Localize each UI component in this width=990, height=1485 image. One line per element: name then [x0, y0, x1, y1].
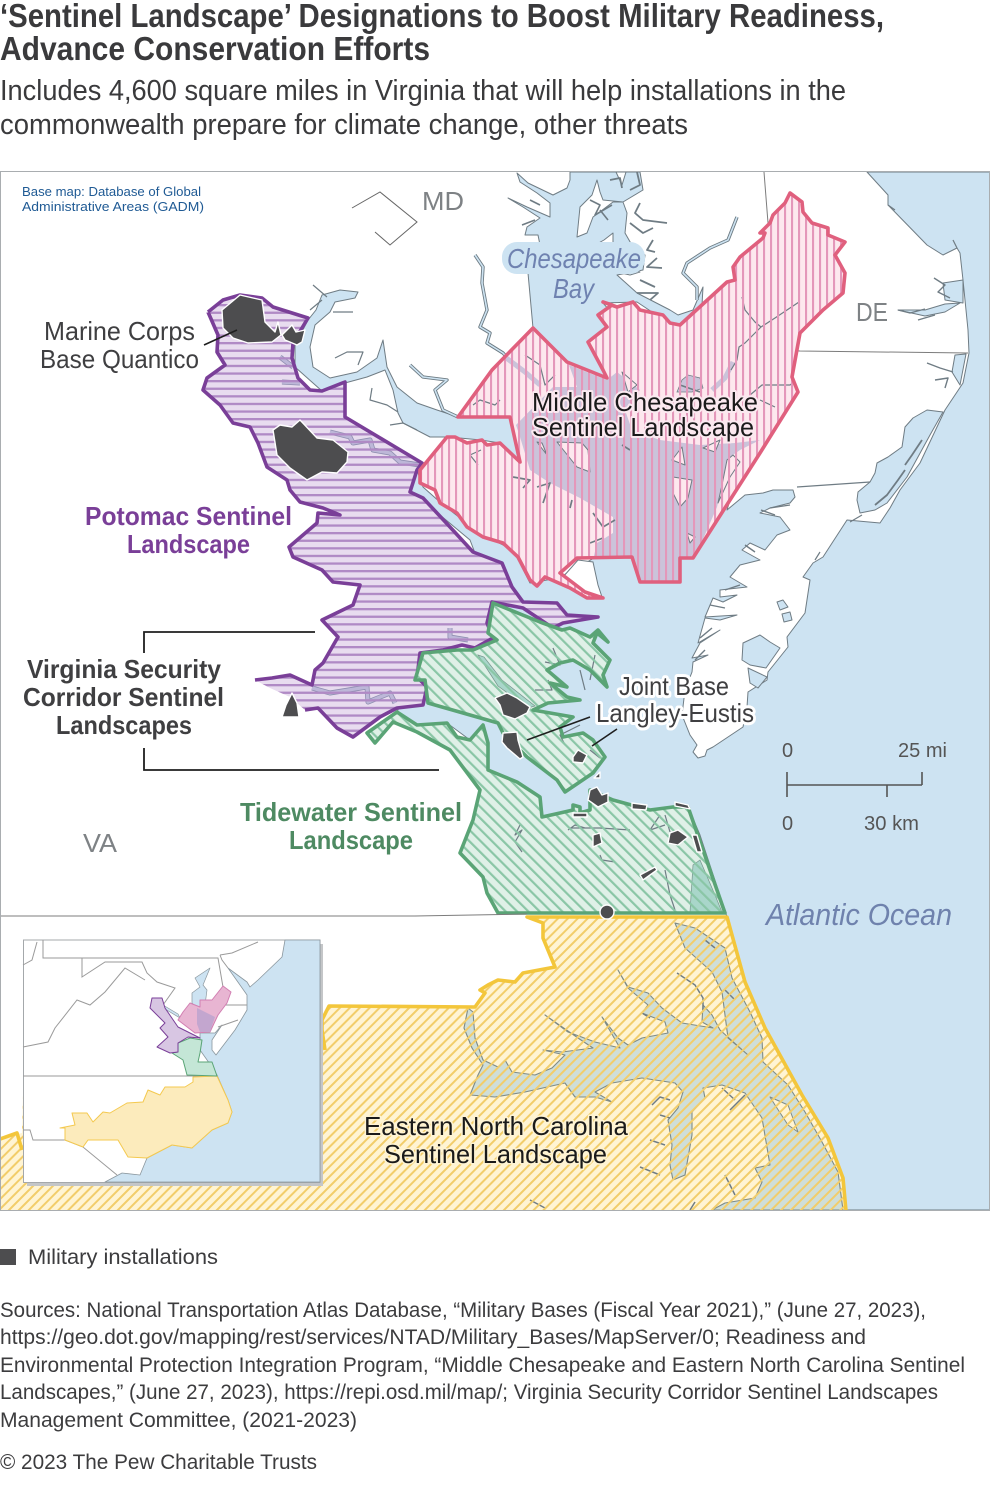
- leader: Quantico: [204, 330, 237, 345]
- label: Virginia Security Corridor Sentinel Landscapes: Landscapes: [56, 710, 192, 740]
- base map note: Administrative Areas (GADM): [22, 199, 204, 214]
- title: [0, 0, 884, 67]
- water: ocean and Chesapeake Bay: [295, 172, 990, 1210]
- green region inner water: [478, 655, 722, 912]
- purple region rivers: [280, 357, 468, 703]
- inset state lines: [23, 940, 258, 1175]
- label: Potomac Sentinel Landscape: [86, 506, 290, 558]
- label: Potomac Sentinel Landscape: Potomac Sentinel: [85, 501, 292, 531]
- water: coastal lagoons and inlets on the Delmarva shore: [742, 280, 966, 688]
- label: Chesapeake Bay: [502, 242, 645, 304]
- inset upper bay: [163, 968, 210, 1018]
- label: Virginia Security Corridor Sentinel Landscapes: Virginia Security: [27, 654, 222, 684]
- sources: Environmental Protection Integration Program, “Middle Chesapeake and Eastern North Carolina Sentinel: [0, 1354, 965, 1377]
- military installations: [222, 295, 702, 919]
- subtitle: Includes 4,600 square miles in Virginia that will help installations in the: [0, 75, 846, 107]
- state line: Virginia and North Carolina border: [0, 914, 527, 916]
- legend: military installations: Military installations: [28, 1246, 218, 1269]
- label: Tidewater Sentinel Landscape: [240, 802, 460, 854]
- map frame: [0, 172, 990, 1210]
- label: Virginia Security Corridor Sentinel Landscapes: Corridor Sentinel: [23, 682, 224, 712]
- inset locator map: [23, 940, 323, 1186]
- sources: Landscapes,” (June 27, 2023), https://repi.osd.mil/map/; Virginia Security Corridor Sentinel Landscapes: [0, 1381, 938, 1404]
- label: Joint Base Langley-Eustis: Langley-Eustis: [596, 698, 754, 728]
- state line: Maryland and Delaware border: [764, 172, 968, 353]
- label: Joint Base Langley-Eustis: [596, 671, 754, 728]
- region: Middle Chesapeake Sentinel Landscape: [418, 191, 847, 600]
- panel: map: [0, 171, 990, 1211]
- label: Tidewater Sentinel Landscape: Tidewater Sentinel: [240, 797, 462, 827]
- label: Marine Corps Base Quantico: Base Quantico: [40, 344, 199, 374]
- label: Joint Base Langley-Eustis: Joint Base: [619, 671, 729, 701]
- state line: Washington DC diamond: [352, 192, 417, 245]
- label: Eastern North Carolina Sentinel Landscape: Eastern North Carolina: [364, 1111, 629, 1141]
- scale bar: [782, 740, 947, 835]
- inset Potomac: [150, 998, 200, 1053]
- subtitle: commonwealth prepare for climate change, other threats: [0, 109, 688, 141]
- leaders: Joint Base Langley-Eustis: [527, 717, 617, 746]
- label: Potomac Sentinel Landscape: Landscape: [127, 529, 250, 559]
- state labels: VA: [83, 828, 118, 858]
- label: Virginia Security Corridor Sentinel Landscapes: [23, 654, 224, 740]
- label: Eastern North Carolina Sentinel Landscape: [364, 1111, 629, 1169]
- base map note: Base map: Database of Global: [22, 184, 201, 199]
- label: Atlantic Ocean: Atlantic Ocean: [764, 897, 952, 932]
- label: Middle Chesapeake Sentinel Landscape: [532, 387, 758, 442]
- label: Chesapeake Bay: Chesapeake: [507, 243, 641, 274]
- thin rivers and coast detail: [310, 172, 957, 660]
- sources: Sources: National Transportation Atlas Database, “Military Bases (Fiscal Year 2021),” (June 27, 2023),: [0, 1299, 926, 1322]
- region: Tidewater Sentinel Landscape: [367, 603, 725, 913]
- label: Marine Corps Base Quantico: Marine Corps: [44, 316, 195, 346]
- copyright: © 2023 The Pew Charitable Trusts: [0, 1451, 317, 1474]
- inset ocean: [105, 940, 320, 1182]
- label: Chesapeake Bay: Bay: [553, 273, 596, 304]
- subtitle: [0, 75, 846, 141]
- scale bar: 0: [782, 813, 793, 835]
- state labels: MD: [422, 186, 464, 216]
- inset Tidewater: [172, 1038, 217, 1076]
- sounds inside the yellow region: [464, 923, 843, 1210]
- bay water under the pink hatch: [422, 196, 842, 596]
- inset Middle Chesapeake: [178, 986, 231, 1033]
- scale bar: 25 mi: [898, 740, 947, 762]
- scale bar: 0: [782, 740, 793, 762]
- region: Potomac Sentinel Landscape: [203, 295, 598, 737]
- sources: https://geo.dot.gov/mapping/rest/services/NTAD/Military_Bases/MapServer/0; Readiness and: [0, 1326, 866, 1349]
- state labels: DE: [856, 297, 888, 327]
- label: Tidewater Sentinel Landscape: Landscape: [289, 825, 413, 855]
- inset Eastern NC: [60, 1076, 232, 1158]
- land: white shore below pink notch: [563, 560, 602, 597]
- bracket: Virginia Security Corridor: [144, 632, 439, 770]
- state labels: [83, 186, 888, 858]
- label: Middle Chesapeake Sentinel Landscape: Middle Chesapeake: [532, 387, 758, 417]
- base map note: [22, 186, 204, 214]
- title: Advance Conservation Efforts: [0, 30, 430, 67]
- label: Marine Corps Base Quantico: [42, 321, 198, 373]
- sources: [0, 1299, 965, 1432]
- label: Eastern North Carolina Sentinel Landscape: Sentinel Landscape: [384, 1139, 607, 1169]
- scale bar: 30 km: [864, 813, 919, 835]
- label: Middle Chesapeake Sentinel Landscape: Sentinel Landscape: [532, 412, 754, 442]
- land: upper bay peninsula and island: [577, 172, 640, 275]
- sources: Management Committee, (2021-2023): [0, 1409, 357, 1432]
- region: Eastern North Carolina Sentinel Landscape: [0, 917, 846, 1211]
